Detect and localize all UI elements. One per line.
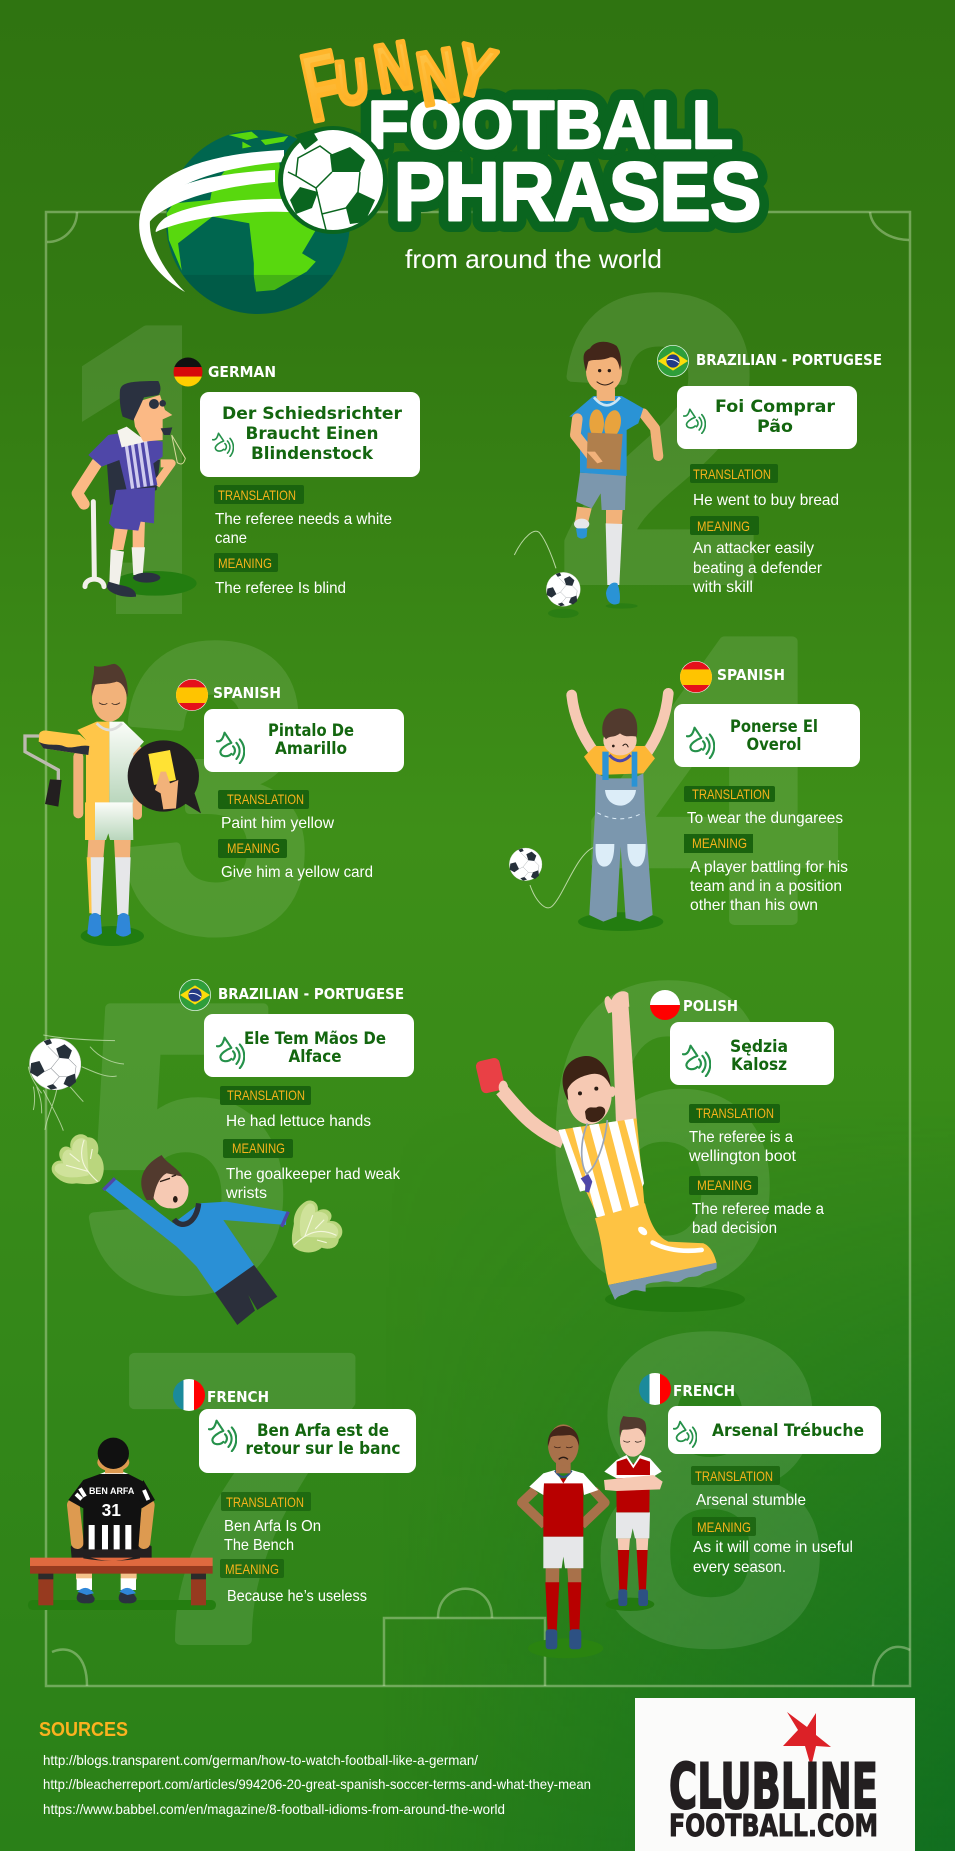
big number 8: 8 bbox=[592, 1247, 828, 1733]
language label: SPANISH bbox=[717, 666, 785, 684]
meaning bbox=[218, 839, 373, 881]
meaning bbox=[690, 516, 823, 596]
translation bbox=[691, 1466, 806, 1509]
big number 2: 2 bbox=[556, 213, 764, 666]
phrase box bbox=[677, 386, 857, 449]
panel: 2 brazilian-portugese bbox=[514, 342, 882, 618]
meaning: As it will come in useful bbox=[693, 1539, 853, 1556]
source links: http://blogs.transparent.com/german/how-to-watch-football-like-a-german/ bbox=[43, 1752, 478, 1768]
meaning bbox=[223, 1139, 401, 1202]
translation: He had lettuce hands bbox=[226, 1113, 371, 1130]
phrase box: retour sur le banc bbox=[246, 1439, 400, 1458]
source links bbox=[43, 1752, 591, 1817]
big number 1: 1 bbox=[49, 242, 274, 695]
phrase box: Ponerse El bbox=[730, 717, 818, 736]
language label: FRENCH bbox=[207, 1388, 269, 1406]
phrase box: Blindenstock bbox=[251, 444, 374, 463]
meaning bbox=[220, 1559, 367, 1605]
translation bbox=[218, 790, 334, 832]
translation bbox=[220, 1086, 371, 1130]
phrase box: Foi Comprar bbox=[715, 397, 836, 416]
translation: TRANSLATION bbox=[695, 1468, 773, 1484]
flag: brazil bbox=[657, 345, 689, 377]
source links: https://www.babbel.com/en/magazine/8-football-idioms-from-around-the-world bbox=[43, 1801, 505, 1817]
title soccer ball bbox=[278, 126, 388, 234]
phrase box: Braucht Einen bbox=[246, 424, 378, 443]
translation: TRANSLATION bbox=[218, 487, 296, 503]
translation: TRANSLATION bbox=[692, 786, 770, 802]
illustration: two Arsenal players bbox=[522, 1416, 663, 1658]
language label: BRAZILIAN - PORTUGESE bbox=[696, 351, 882, 369]
translation bbox=[690, 464, 839, 509]
language label: FRENCH bbox=[673, 1382, 735, 1400]
translation bbox=[221, 1492, 321, 1554]
clubline football logo bbox=[635, 1698, 915, 1851]
translation: TRANSLATION bbox=[227, 1087, 305, 1103]
sources bbox=[39, 1719, 591, 1817]
meaning: with skill bbox=[692, 579, 753, 596]
meaning: An attacker easily bbox=[693, 540, 814, 557]
phrase box: Kalosz bbox=[731, 1055, 787, 1074]
translation bbox=[214, 485, 392, 547]
football pitch outline bbox=[46, 212, 910, 1686]
phrase box: Pão bbox=[757, 417, 793, 436]
meaning: MEANING bbox=[697, 1177, 752, 1193]
phrases title: PHRASES bbox=[394, 145, 761, 238]
meaning: MEANING bbox=[227, 840, 280, 856]
illustration: Ben Arfa on the bench: 31 bbox=[102, 1500, 121, 1520]
illustration: player in dungarees bbox=[509, 693, 668, 931]
logo domain: FOOTBALL.COM bbox=[669, 1809, 878, 1844]
funny title: Y bbox=[447, 30, 502, 114]
meaning: A player battling for his bbox=[690, 859, 848, 876]
illustration: referee with white cane bbox=[77, 381, 197, 597]
translation bbox=[684, 786, 843, 827]
phrase box: Sędzia bbox=[730, 1037, 788, 1056]
translation: Paint him yellow bbox=[221, 815, 334, 832]
flag: france bbox=[639, 1373, 671, 1405]
flag: spain bbox=[680, 661, 712, 693]
meaning bbox=[684, 834, 848, 914]
phrases title: PHRASES bbox=[394, 145, 761, 238]
panel: 1 german bbox=[77, 358, 420, 597]
language label: POLISH bbox=[683, 997, 738, 1015]
globe and title group bbox=[139, 26, 761, 315]
meaning: other than his own bbox=[690, 897, 818, 914]
meaning bbox=[214, 553, 346, 597]
big number 5: 5 bbox=[82, 920, 289, 1373]
phrase box bbox=[674, 704, 860, 767]
illustration: Ben Arfa on the bench bbox=[28, 1438, 216, 1610]
motion swooshes bbox=[139, 150, 290, 292]
meaning: MEANING bbox=[225, 1561, 279, 1577]
phrase box bbox=[204, 709, 404, 772]
phrase box: Alface bbox=[288, 1047, 342, 1066]
phrase box: Ele Tem Mãos De bbox=[244, 1029, 386, 1048]
translation: Arsenal stumble bbox=[696, 1492, 806, 1509]
phrase box: Arsenal Trébuche bbox=[712, 1421, 864, 1440]
panel: 4 spanish bbox=[509, 661, 860, 931]
meaning: beating a defender bbox=[693, 560, 823, 577]
big number 6: 6 bbox=[545, 898, 780, 1373]
flag: brazil bbox=[179, 979, 211, 1011]
icon: red star bbox=[783, 1712, 831, 1767]
big number 4: 4 bbox=[590, 553, 838, 1006]
source links: http://bleacherreport.com/articles/994206-20-great-spanish-soccer-terms-and-what-they-mean bbox=[43, 1776, 591, 1792]
translation: TRANSLATION bbox=[696, 1105, 774, 1121]
phrase box: Pintalo De bbox=[268, 721, 354, 740]
flag: france bbox=[173, 1379, 205, 1411]
phrase box: Ben Arfa est de bbox=[257, 1421, 389, 1440]
meaning: every season. bbox=[693, 1559, 786, 1576]
language label: SPANISH bbox=[213, 684, 281, 702]
meaning: team and in a position bbox=[690, 878, 842, 895]
meaning: Because he’s useless bbox=[227, 1588, 367, 1605]
meaning: MEANING bbox=[232, 1140, 285, 1156]
panel: 5 brazilian-portugese bbox=[28, 979, 414, 1325]
translation: wellington boot bbox=[688, 1148, 797, 1165]
meaning: The goalkeeper had weak bbox=[226, 1166, 401, 1183]
meaning: Give him a yellow card bbox=[221, 864, 373, 881]
phrase box bbox=[668, 1406, 881, 1454]
panel: 6 polish bbox=[475, 990, 834, 1312]
panel: 8 french bbox=[522, 1373, 881, 1658]
funny title bbox=[293, 26, 502, 142]
meaning: MEANING bbox=[697, 518, 750, 534]
meaning: MEANING bbox=[692, 835, 747, 851]
illustration: Ben Arfa on the bench: BEN ARFA bbox=[89, 1486, 135, 1496]
football title: FOOTBALL bbox=[368, 87, 733, 163]
phrase box: Overol bbox=[746, 735, 802, 754]
football title: FOOTBALL bbox=[368, 87, 733, 163]
meaning bbox=[689, 1176, 824, 1237]
translation: cane bbox=[215, 530, 247, 547]
panel: 7 french bbox=[28, 1379, 416, 1610]
translation: TRANSLATION bbox=[227, 791, 304, 807]
translation: TRANSLATION bbox=[226, 1494, 304, 1510]
meaning: wrists bbox=[225, 1185, 267, 1202]
panel: 3 spanish bbox=[25, 664, 404, 946]
big number 7: 7 bbox=[115, 1269, 370, 1727]
meaning bbox=[692, 1517, 853, 1576]
translation: To wear the dungarees bbox=[687, 810, 843, 827]
big number 3: 3 bbox=[120, 561, 313, 1014]
language label: GERMAN bbox=[208, 363, 276, 381]
meaning: MEANING bbox=[697, 1519, 751, 1535]
funny title: F bbox=[293, 30, 351, 142]
translation: TRANSLATION bbox=[693, 466, 771, 482]
translation: The referee needs a white bbox=[215, 511, 392, 528]
illustration: player with bread bbox=[514, 342, 658, 618]
phrase box bbox=[670, 1022, 834, 1085]
funny title: N bbox=[369, 26, 417, 108]
phrase box bbox=[204, 1014, 414, 1077]
flag: poland bbox=[650, 990, 680, 1020]
translation: The referee is a bbox=[689, 1129, 793, 1146]
flag: spain bbox=[176, 679, 208, 711]
translation: Ben Arfa Is On bbox=[224, 1518, 321, 1535]
meaning: The referee Is blind bbox=[215, 580, 346, 597]
flag: germany bbox=[174, 358, 202, 386]
meaning: bad decision bbox=[692, 1220, 777, 1237]
sources heading: SOURCES bbox=[39, 1719, 128, 1741]
globe bbox=[166, 130, 350, 314]
subtitle: from around the world bbox=[405, 244, 662, 274]
funny title: N bbox=[411, 32, 465, 123]
illustration: referee as wellington boot bbox=[475, 991, 745, 1312]
phrase box: Amarillo bbox=[275, 739, 347, 758]
illustration: goalkeeper with lettuce hands bbox=[28, 1035, 345, 1325]
illustration: player painted yellow bbox=[25, 664, 201, 946]
translation: The Bench bbox=[224, 1537, 294, 1554]
meaning: The referee made a bbox=[692, 1201, 824, 1218]
funny title: U bbox=[332, 47, 372, 119]
meaning: MEANING bbox=[218, 555, 272, 571]
translation bbox=[688, 1104, 797, 1165]
phrase box bbox=[200, 392, 420, 477]
language label: BRAZILIAN - PORTUGESE bbox=[218, 985, 404, 1003]
translation: He went to buy bread bbox=[693, 492, 839, 509]
phrase box: Der Schiedsrichter bbox=[222, 404, 403, 423]
phrase box bbox=[199, 1409, 416, 1473]
